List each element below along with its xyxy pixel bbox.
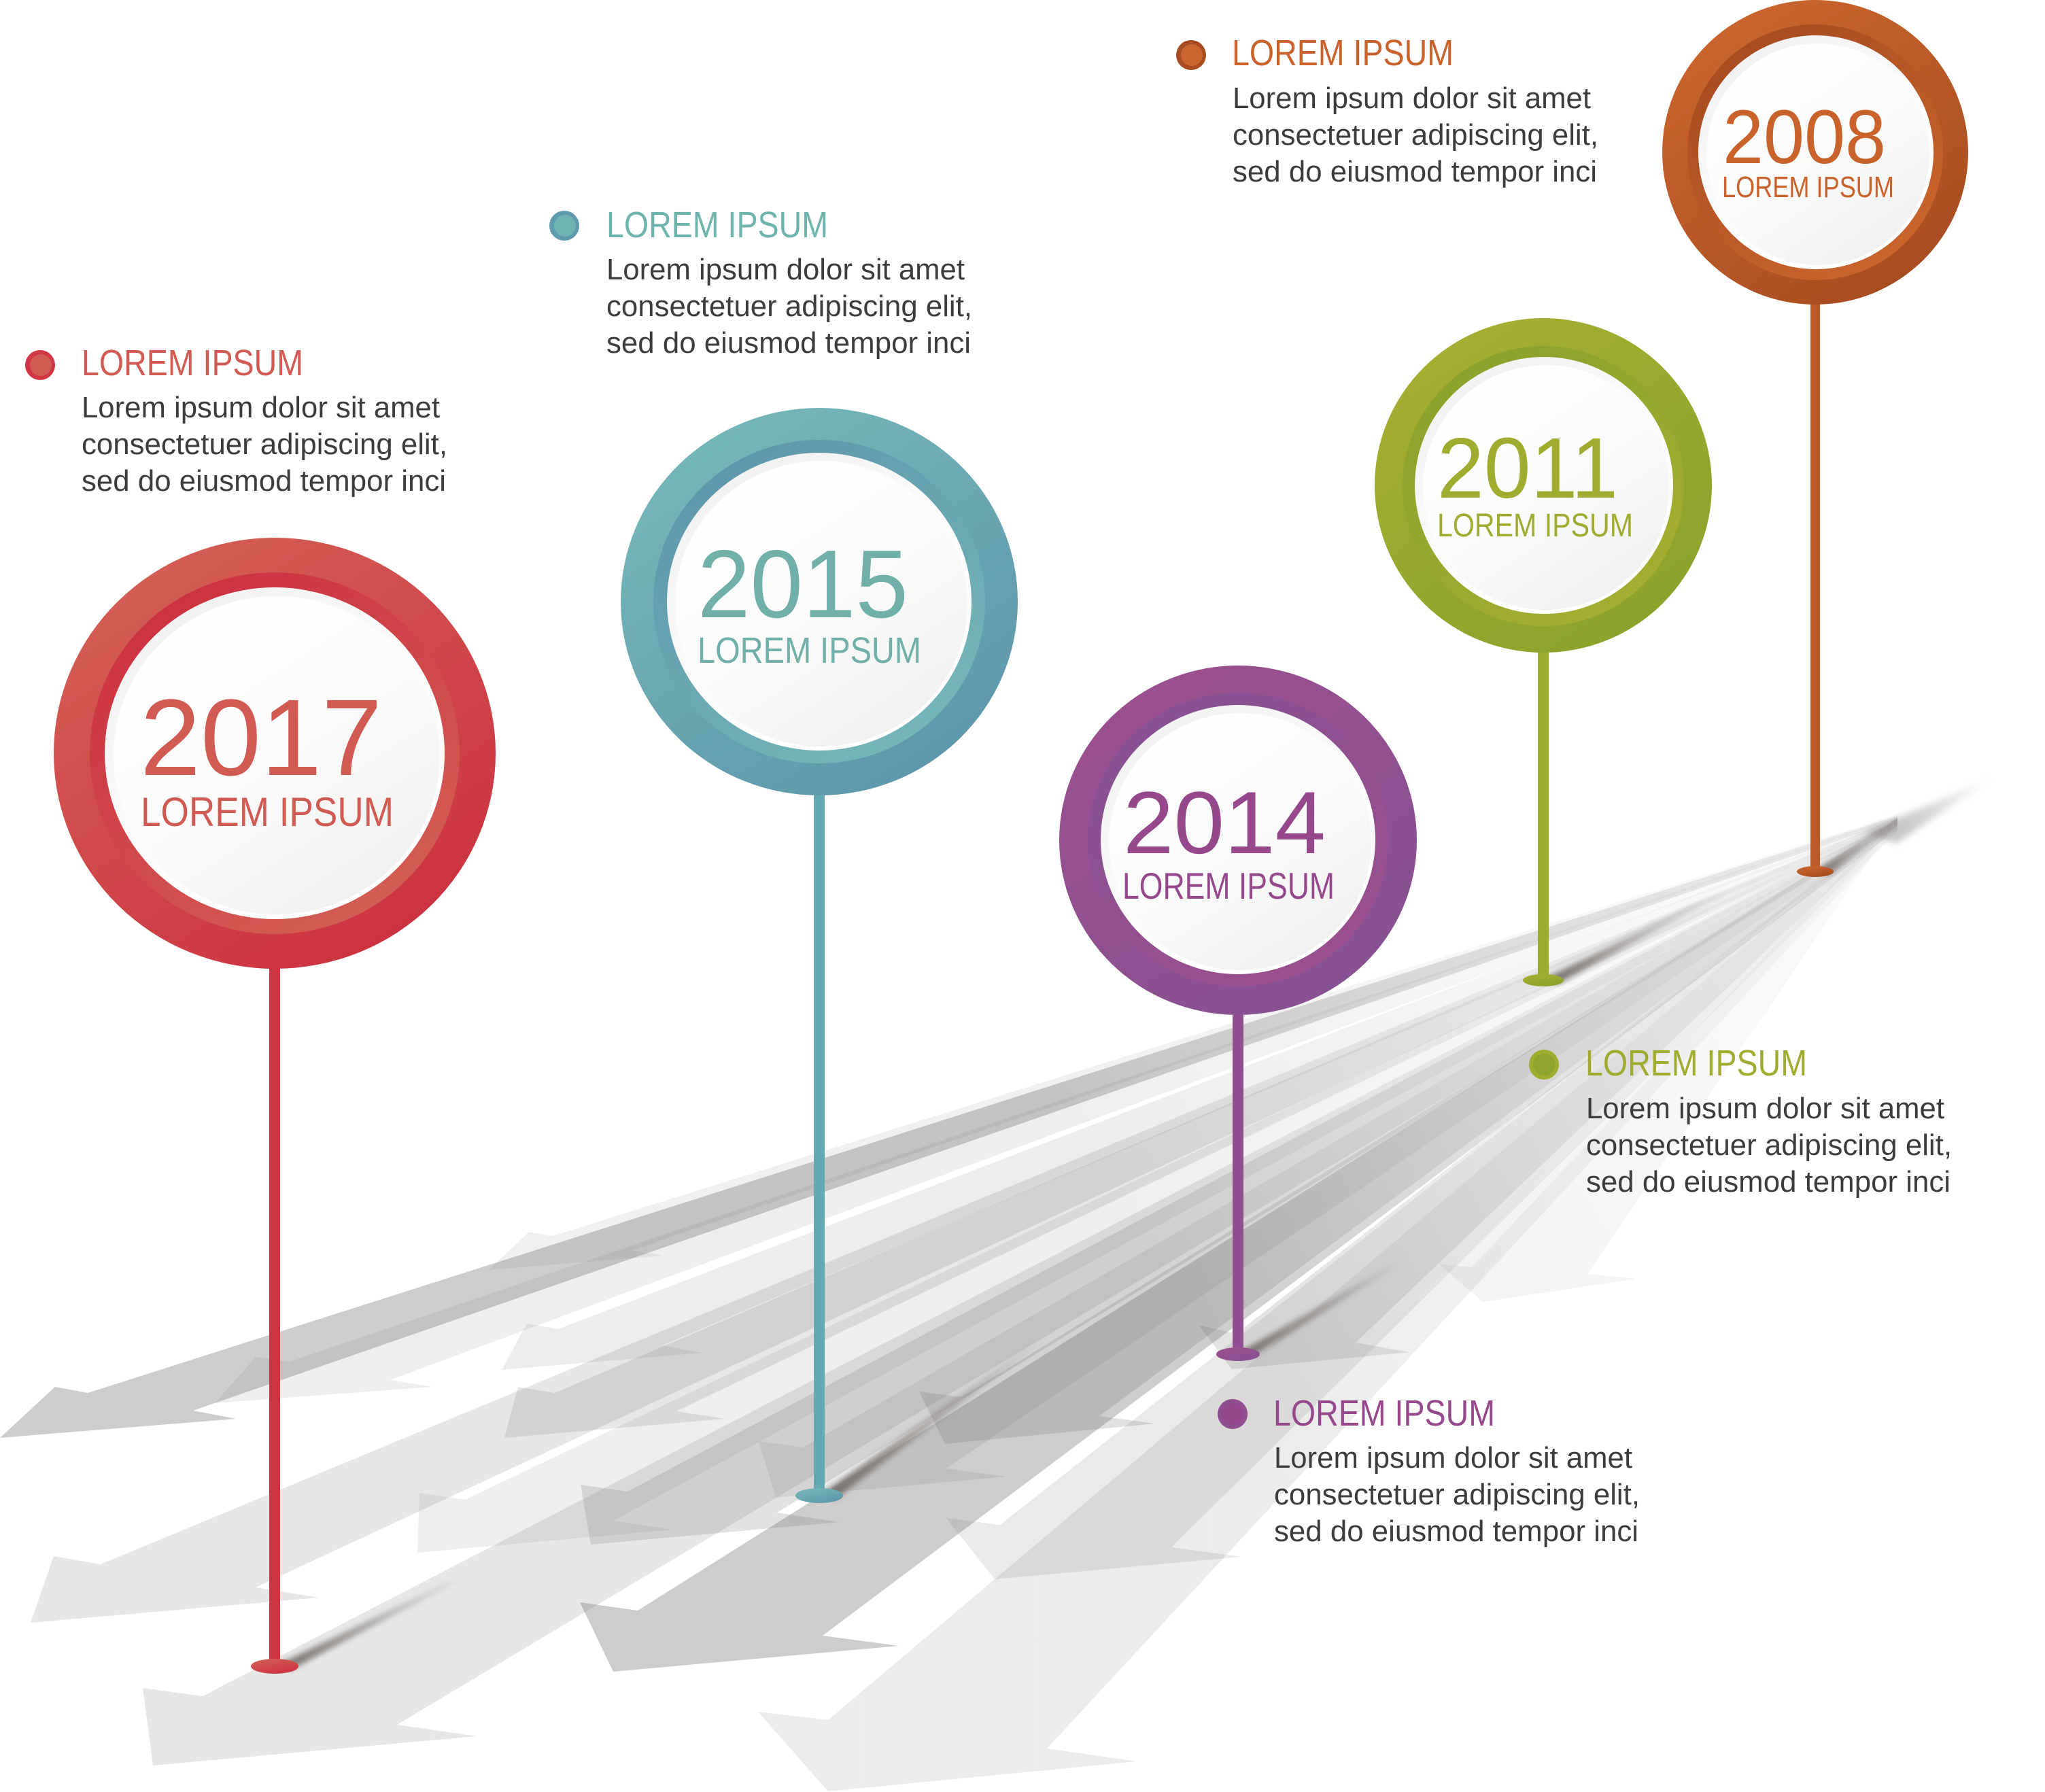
year: 2011 — [1437, 420, 1618, 516]
text block: orange 2008 — [1176, 33, 1598, 188]
heading: LOREM IPSUM — [1273, 1393, 1495, 1434]
bullet — [1176, 40, 1206, 70]
arrow: left long arrow — [31, 818, 1897, 1623]
base — [1523, 974, 1564, 986]
arrow: far left dark arrow — [0, 816, 1897, 1438]
outer ring — [54, 538, 496, 969]
heading: LOREM IPSUM — [606, 205, 828, 245]
inner ring — [90, 572, 460, 934]
body text — [82, 391, 447, 498]
body text: sed do eiusmod tempor inci — [1233, 155, 1597, 188]
year: 2008 — [1723, 94, 1886, 179]
arrow: darker arrow behind teal pin — [919, 819, 1897, 1444]
shadow: green pin — [1547, 889, 1729, 984]
white disc — [1415, 357, 1673, 614]
heading: LOREM IPSUM — [82, 343, 303, 383]
label: LOREM IPSUM — [141, 789, 394, 835]
shadow: purple pin — [1241, 1256, 1409, 1357]
heading: LOREM IPSUM — [1232, 33, 1454, 73]
body text: sed do eiusmod tempor inci — [1274, 1515, 1638, 1548]
arrow: light mid arrow — [502, 817, 1897, 1370]
shadow: teal pin — [823, 1334, 1049, 1500]
heading: LOREM IPSUM — [1585, 1043, 1807, 1084]
year: 2015 — [698, 530, 908, 638]
body text: consectetuer adipiscing elit, — [1274, 1478, 1640, 1511]
label: LOREM IPSUM — [698, 630, 921, 671]
body text: consectetuer adipiscing elit, — [1233, 118, 1598, 152]
base — [1797, 866, 1834, 877]
white disc — [667, 453, 972, 751]
pin: 2015 teal — [621, 408, 1018, 1503]
stem — [1810, 302, 1820, 872]
body text — [1274, 1441, 1640, 1548]
pin: 2017 red — [54, 538, 496, 1674]
white disc face — [1423, 365, 1669, 610]
pin: 2008 orange — [1662, 0, 1968, 877]
arrow: centre light arrow — [417, 818, 1897, 1553]
arrow: centre grey arrow — [581, 819, 1897, 1545]
white disc face — [675, 461, 967, 746]
body text: sed do eiusmod tempor inci — [1586, 1165, 1951, 1199]
body text: sed do eiusmod tempor inci — [606, 326, 971, 360]
text block: green 2011 — [1529, 1043, 1952, 1199]
text block: teal 2015 — [549, 205, 972, 360]
white disc face — [1109, 713, 1371, 970]
body text — [606, 253, 972, 360]
body text: Lorem ipsum dolor sit amet — [1274, 1441, 1632, 1475]
white disc face — [1706, 44, 1929, 265]
body text: sed do eiusmod tempor inci — [82, 464, 446, 498]
stem — [814, 792, 825, 1496]
body text: Lorem ipsum dolor sit amet — [82, 391, 440, 424]
white disc — [1698, 35, 1934, 269]
arrow: purple pin arrow — [1199, 817, 1897, 1369]
base — [795, 1488, 843, 1503]
arrow: large dark arrow — [580, 819, 1897, 1672]
stem — [1538, 649, 1549, 980]
arrow: lower centre arrow near teal pin — [759, 819, 1897, 1498]
pin shadows — [279, 824, 1889, 1671]
outer ring — [1059, 666, 1417, 1015]
outer ring — [621, 408, 1018, 795]
body text — [1233, 82, 1598, 188]
year: 2014 — [1123, 773, 1326, 872]
bullet — [549, 211, 579, 241]
inner ring — [653, 440, 985, 763]
text block: red 2017 — [25, 343, 447, 498]
arrow: mid arrow — [504, 817, 1897, 1438]
stem — [1233, 1012, 1243, 1354]
outer ring — [1375, 318, 1712, 653]
body text: consectetuer adipiscing elit, — [606, 290, 972, 323]
body text: consectetuer adipiscing elit, — [1586, 1128, 1952, 1162]
bullet — [1218, 1399, 1248, 1429]
base — [1216, 1347, 1260, 1361]
pin: 2014 purple — [1059, 666, 1417, 1361]
shadow: orange pin — [1819, 824, 1889, 876]
inner ring — [1088, 693, 1388, 986]
outer ring — [1662, 0, 1968, 305]
body text — [1586, 1092, 1952, 1199]
text block: purple 2014 — [1218, 1393, 1640, 1548]
arrow: bottom left arrow — [143, 819, 1897, 1765]
inner ring — [1403, 346, 1684, 626]
label: LOREM IPSUM — [1437, 508, 1633, 544]
arrow: top light arrow — [489, 814, 1897, 1270]
bullet — [1529, 1050, 1559, 1080]
arrow: second upper arrow — [215, 816, 1897, 1403]
white disc — [1101, 705, 1375, 974]
label: LOREM IPSUM — [1722, 171, 1894, 204]
arrow: far right arrow — [1439, 815, 1897, 1302]
shadow: red pin — [279, 1572, 470, 1671]
inner ring — [1687, 24, 1943, 280]
body text: Lorem ipsum dolor sit amet — [606, 253, 965, 286]
arrow: right lower arrow — [946, 819, 1897, 1579]
white disc face — [114, 596, 440, 914]
panel: converging perspective arrows — [0, 776, 1995, 1791]
year: 2017 — [140, 676, 382, 798]
arrow: bottom light arrow — [758, 817, 1897, 1791]
pin: 2011 green — [1375, 318, 1712, 986]
label: LOREM IPSUM — [1122, 865, 1335, 907]
streak: fading vanishing point — [1863, 776, 1995, 843]
base — [251, 1659, 298, 1674]
white disc — [105, 587, 445, 919]
body text: Lorem ipsum dolor sit amet — [1233, 82, 1591, 115]
body text: consectetuer adipiscing elit, — [82, 428, 447, 461]
stem — [269, 965, 280, 1666]
bullet — [25, 350, 55, 380]
body text: Lorem ipsum dolor sit amet — [1586, 1092, 1944, 1125]
